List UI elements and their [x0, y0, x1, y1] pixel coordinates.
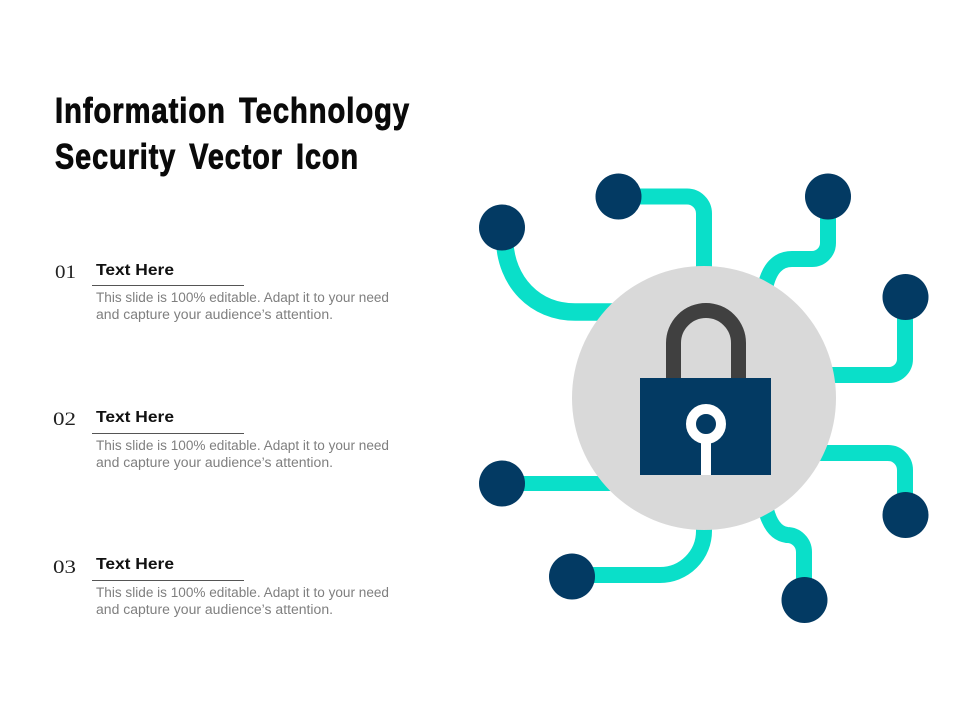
title	[55, 92, 410, 176]
item 01	[55, 262, 389, 322]
item 03: Text Here	[96, 556, 174, 573]
title: Information Technology	[55, 92, 410, 130]
central circle	[572, 266, 836, 530]
item 02	[53, 409, 389, 470]
item 03: This slide is 100% editable. Adapt it to your need	[96, 585, 389, 600]
item 03	[53, 556, 389, 617]
item 02: This slide is 100% editable. Adapt it to your need	[96, 438, 389, 453]
item 03: 03	[53, 557, 76, 578]
network connectors	[502, 196, 905, 600]
item 01: This slide is 100% editable. Adapt it to your need	[96, 290, 389, 305]
item 03: and capture your audience’s attention.	[96, 602, 333, 617]
item 02: and capture your audience’s attention.	[96, 455, 333, 470]
item 02: 02	[53, 409, 76, 430]
item 01: Text Here	[96, 262, 174, 279]
icon: padlock	[640, 310, 771, 475]
item 01: and capture your audience’s attention.	[96, 307, 333, 322]
network nodes	[479, 174, 928, 623]
item 01: 01	[55, 262, 76, 283]
item 02: Text Here	[96, 409, 174, 426]
title: Security Vector Icon	[55, 138, 359, 176]
